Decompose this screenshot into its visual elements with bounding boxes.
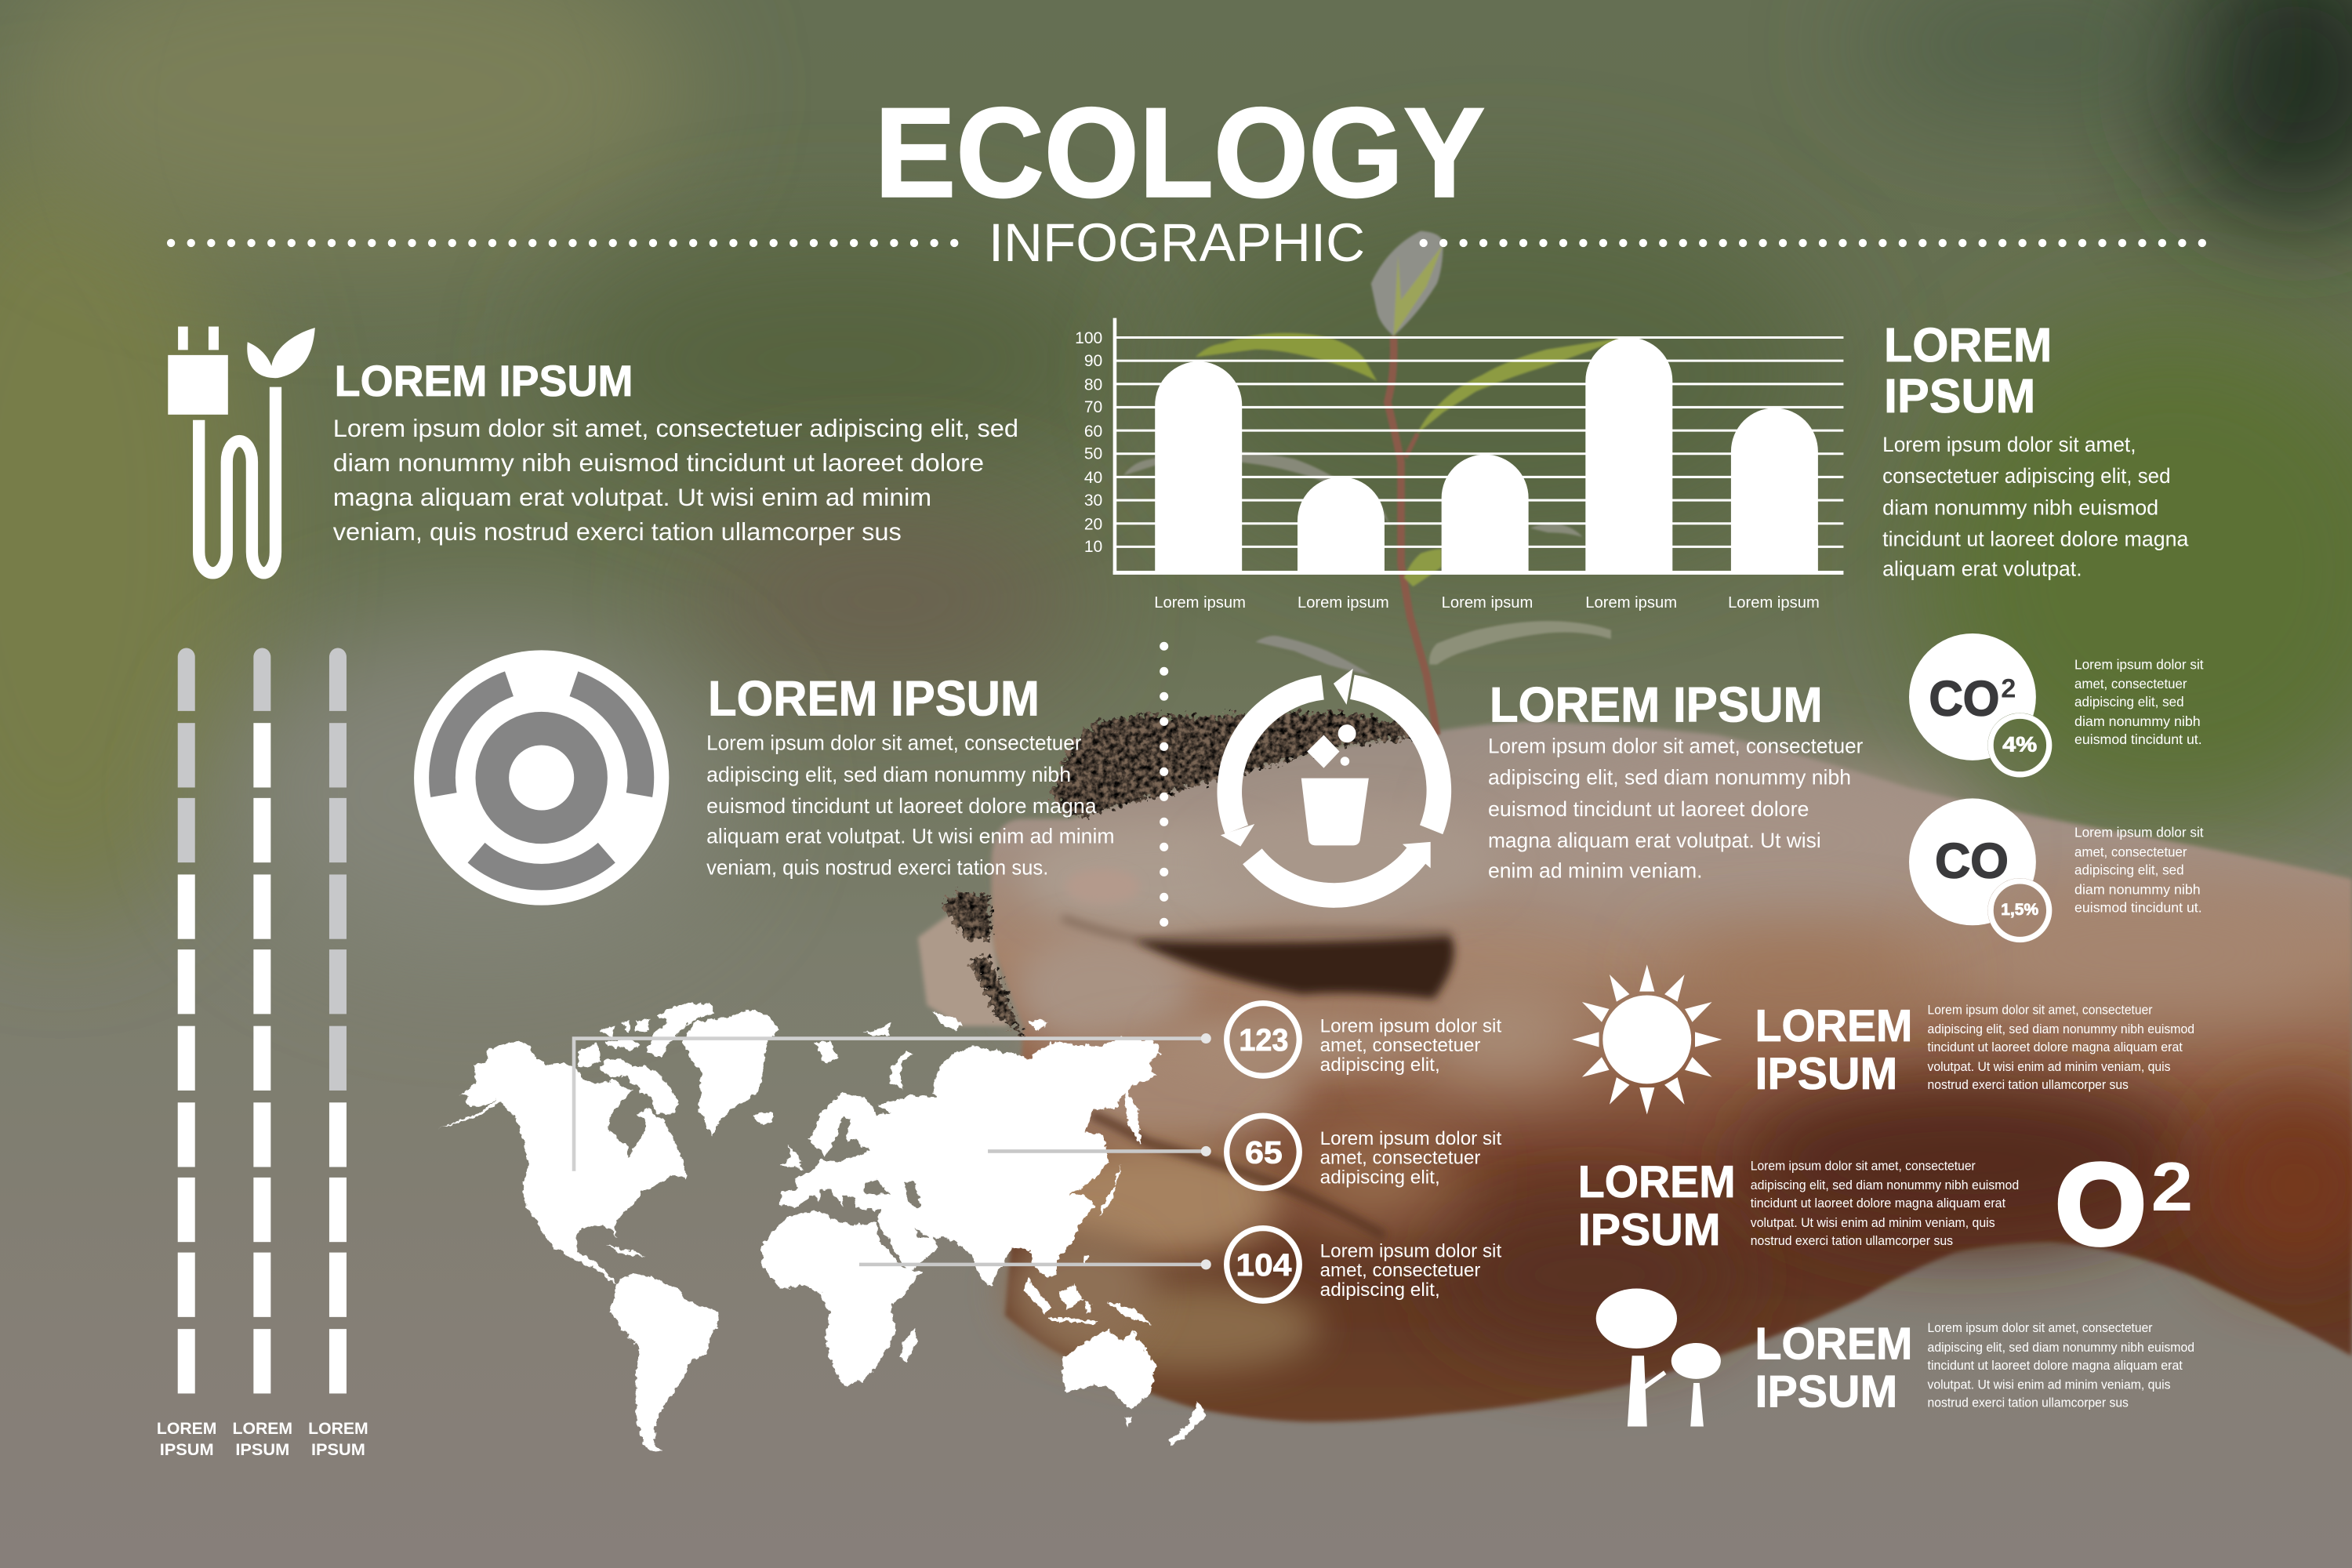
panel: middle-left text: aliquam erat volutpat. Ut wisi enim ad minim [706,824,1115,848]
panel: middle-right text: enim ad minim veniam. [1488,858,1703,882]
panel: trees text [1755,1319,2194,1417]
progress columns: LOREM [233,1420,292,1438]
stat: 104: 104 [1236,1247,1292,1283]
panel: sun text: volutpat. Ut wisi enim ad minim veniam, quis [1928,1059,2170,1074]
bar chart: Lorem ipsum [1585,594,1677,612]
dotted divider right [1424,241,2205,245]
panel: top-right text: tincidunt ut laoreet dolore magna [1882,527,2189,550]
bar chart: 100 [1075,329,1102,347]
panel: oxygen text: nostrud exerci tation ullamcorper sus [1751,1233,1953,1248]
stat: CO2 4% [1909,633,2204,775]
panel: oxygen text: IPSUM [1578,1205,1721,1255]
dotted divider left [171,241,957,245]
panel: middle-left text: euismod tincidunt ut laoreet dolore magna [706,794,1097,818]
bar chart: Lorem ipsum [1298,594,1389,612]
vertical dotted divider [1162,646,1167,924]
icon: O2 symbol [2056,1140,2193,1268]
stat: CO 1,5%: 1,5% [2001,901,2038,919]
bar chart: 80 [1084,376,1102,394]
stat: CO2 4%: 4% [2002,733,2037,757]
icon: plug and leaf [168,327,315,573]
stat: CO 1,5%: amet, consectetuer [2074,844,2187,859]
panel: sun text [1755,1001,2194,1099]
stat: 104 [1227,1229,1502,1301]
panel: middle-right text: euismod tincidunt ut laoreet dolore [1488,797,1809,821]
panel: top-left text: veniam, quis nostrud exerci tation ullamcorper sus [333,517,902,546]
panel: top-right text [1882,318,2189,581]
panel: sun text: LOREM [1755,1001,1912,1051]
stat: CO2 4%: Lorem ipsum dolor sit [2074,656,2204,672]
bar chart: 10 [1084,538,1102,556]
bar chart: 30 [1084,492,1102,510]
panel: middle-left text: LOREM IPSUM [708,672,1040,727]
callout lines from map [574,1033,1211,1269]
progress columns: IPSUM [311,1441,365,1459]
stat: 104: adipiscing elit, [1320,1279,1440,1301]
title: ECOLOGY [874,82,1485,224]
stat: CO2 4%: amet, consectetuer [2074,676,2187,691]
panel: top-left text: LOREM IPSUM [335,357,633,405]
panel: sun text: Lorem ipsum dolor sit amet, consectetuer [1928,1002,2153,1017]
panel: trees text: volutpat. Ut wisi enim ad minim veniam, quis [1928,1377,2170,1392]
hand [918,711,2352,1422]
stat: CO 1,5%: diam nonummy nibh [2074,881,2201,897]
stat: CO 1,5%: adipiscing elit, sed [2074,862,2184,877]
seedling [1123,231,1624,735]
stat: CO 1,5%: euismod tincidunt ut. [2074,899,2202,915]
subtitle: INFOGRAPHIC [989,212,1365,273]
panel: top-right text: IPSUM [1884,369,2035,423]
panel: top-right text: Lorem ipsum dolor sit amet, [1882,433,2136,456]
bar chart: 40 [1084,469,1102,487]
progress columns: IPSUM [235,1441,289,1459]
stat: CO2 4%: euismod tincidunt ut. [2074,731,2202,747]
stat: 123: Lorem ipsum dolor sit [1320,1015,1502,1036]
panel: trees text: adipiscing elit, sed diam nonummy nibh euismod [1928,1340,2194,1355]
panel: trees text: IPSUM [1755,1367,1897,1417]
icon: circular target diagram [414,650,669,906]
stat: 123: adipiscing elit, [1320,1054,1440,1076]
stat: CO2 4%: diam nonummy nibh [2074,713,2201,729]
progress columns: IPSUM [160,1441,214,1459]
icon: O2 symbol: O [2056,1140,2146,1268]
stat: 123 [1227,1004,1502,1076]
progress columns [157,648,368,1459]
bar chart: 70 [1084,398,1102,416]
panel: middle-left text: veniam, quis nostrud exerci tation sus. [706,855,1048,879]
stat: 104: Lorem ipsum dolor sit [1320,1240,1502,1261]
stat: 65: amet, consectetuer [1320,1148,1480,1169]
stat: 65 [1227,1116,1502,1189]
panel: top-right text: aliquam erat volutpat. [1882,557,2082,581]
panel: top-left text [333,357,1018,546]
panel: top-left text: diam nonummy nibh euismod tincidunt ut laoreet dolore [333,448,984,477]
stat: CO 1,5%: CO [1935,833,2009,888]
bar chart: 90 [1084,352,1102,370]
panel: top-left text: Lorem ipsum dolor sit amet, consectetuer adipiscing elit, sed [333,414,1018,442]
panel: sun text: tincidunt ut laoreet dolore magna aliquam erat [1928,1040,2183,1054]
soil gap between fingers [1134,936,1454,999]
stat: CO2 4%: adipiscing elit, sed [2074,694,2184,710]
panel: top-right text: diam nonummy nibh euismod [1882,495,2158,519]
stat: 104: amet, consectetuer [1320,1260,1480,1281]
panel: oxygen text: volutpat. Ut wisi enim ad minim veniam, quis [1751,1215,1995,1230]
panel: oxygen text: adipiscing elit, sed diam nonummy nibh euismod [1751,1178,2019,1192]
panel: middle-right text: Lorem ipsum dolor sit amet, consectetuer [1488,734,1863,757]
panel: top-right text: LOREM [1884,318,2052,372]
panel: middle-right text [1488,677,1863,882]
bar chart: 20 [1084,515,1102,533]
panel: trees text: nostrud exerci tation ullamcorper sus [1928,1396,2129,1410]
panel: middle-right text: adipiscing elit, sed diam nonummy nibh [1488,766,1851,789]
progress columns: LOREM [157,1420,216,1438]
soil on top [1050,711,1422,819]
icon: trees [1596,1288,1721,1427]
panel: trees text: tincidunt ut laoreet dolore magna aliquam erat [1928,1358,2183,1373]
bar chart: Lorem ipsum [1154,594,1246,612]
stat: 65: adipiscing elit, [1320,1167,1440,1189]
stat: CO2 4%: CO [1929,672,1999,727]
icon: recycling arrows with pot [1221,669,1439,895]
bar chart: Lorem ipsum [1728,594,1820,612]
panel: trees text: Lorem ipsum dolor sit amet, consectetuer [1928,1320,2153,1335]
panel: oxygen text: LOREM [1578,1157,1736,1207]
panel: top-left text: magna aliquam erat volutpat. Ut wisi enim ad minim [333,483,931,511]
panel: top-right text: consectetuer adipiscing elit, sed [1882,464,2170,488]
panel: middle-left text: adipiscing elit, sed diam nonummy nibh [706,763,1071,786]
bar chart: 50 [1084,445,1102,463]
panel: middle-right text: magna aliquam erat volutpat. Ut wisi [1488,829,1821,852]
panel: oxygen text [1578,1157,2019,1255]
world map [439,1003,1205,1453]
panel: sun text: adipiscing elit, sed diam nonummy nibh euismod [1928,1022,2194,1036]
stat: 65: Lorem ipsum dolor sit [1320,1128,1502,1149]
left fingertips [918,912,1008,1026]
bar chart [1075,318,1843,612]
panel: sun text: IPSUM [1755,1049,1897,1099]
icon: O2 symbol: 2 [2151,1148,2193,1225]
stat: CO 1,5% [1909,798,2204,939]
progress columns: LOREM [308,1420,368,1438]
panel: middle-left text: Lorem ipsum dolor sit amet, consectetuer [706,731,1082,755]
stat: 65: 65 [1245,1135,1283,1171]
panel: trees text: LOREM [1755,1319,1912,1369]
lens flare ring [90,0,660,397]
stat: CO 1,5%: Lorem ipsum dolor sit [2074,825,2204,840]
stat: CO2 4%: 2 [2001,674,2016,704]
stat: 123: amet, consectetuer [1320,1035,1480,1056]
panel: middle-right text: LOREM IPSUM [1490,677,1823,732]
bar chart: Lorem ipsum [1442,594,1533,612]
panel: sun text: nostrud exerci tation ullamcorper sus [1928,1077,2129,1092]
stat: 123: 123 [1239,1022,1288,1058]
bar chart: 60 [1084,423,1102,441]
panel: oxygen text: tincidunt ut laoreet dolore magna aliquam erat [1751,1196,2005,1210]
panel: middle-left text [706,672,1115,879]
icon: sun [1572,964,1722,1115]
panel: oxygen text: Lorem ipsum dolor sit amet, consectetuer [1751,1158,1976,1173]
